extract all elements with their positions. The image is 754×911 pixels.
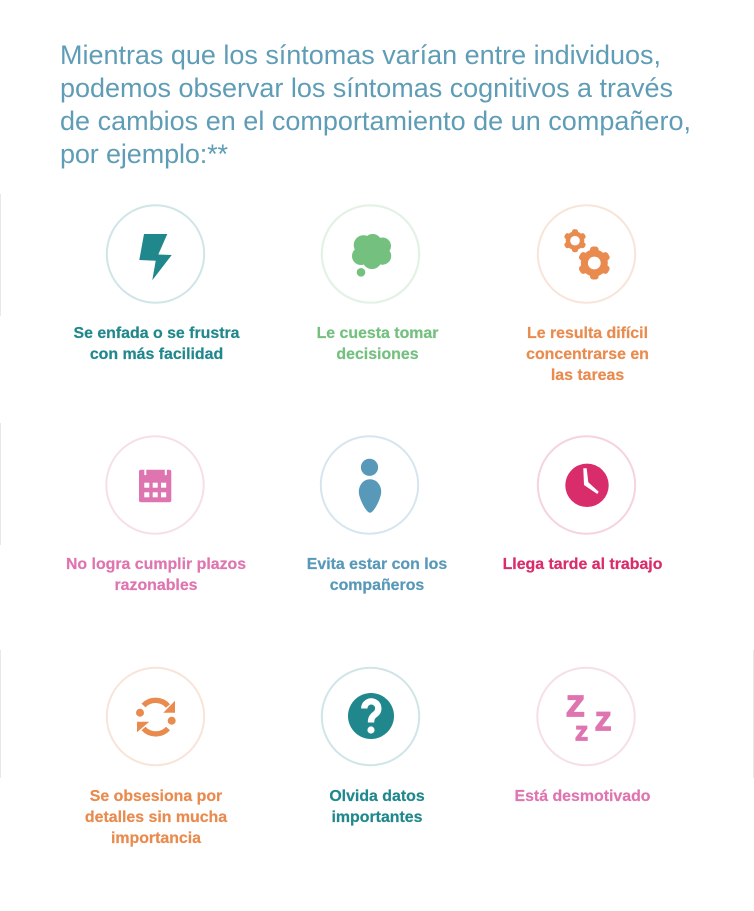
icon: lightning bolt (107, 205, 204, 303)
panel: concentration (526, 205, 649, 384)
title: de cambios en el comportamiento de un compañero, (60, 106, 691, 136)
label: frustration: Se enfada o se frustra (73, 325, 240, 342)
label: frustration: con más facilidad (90, 346, 223, 363)
label: concentration: concentrarse en (526, 346, 649, 363)
icon: person (321, 436, 418, 534)
label: avoids colleagues: compañeros (330, 577, 424, 594)
title (60, 40, 691, 169)
icon: question mark (322, 668, 419, 765)
panel: unmotivated (514, 668, 651, 805)
label: concentration: Le resulta difícil (527, 325, 648, 342)
title: por ejemplo:** (60, 139, 228, 169)
label: deadlines: No logra cumplir plazos (66, 556, 246, 573)
panel: deadlines (66, 436, 246, 594)
panel: frustration (73, 205, 240, 363)
title: podemos observar los síntomas cognitivos a través (60, 73, 673, 103)
icon: sleeping Z letters: Z (596, 708, 611, 736)
panel: obsession (85, 668, 227, 847)
icon: thought cloud (322, 205, 419, 303)
label: deadlines: razonables (114, 577, 198, 594)
panel: avoids colleagues (307, 436, 447, 594)
icon: sleeping Z letters (537, 668, 635, 765)
label: late: Llega tarde al trabajo (503, 556, 663, 573)
panel: late (503, 436, 663, 573)
icon: sync arrows (107, 668, 204, 765)
label: obsession: importancia (111, 830, 201, 847)
icon: clock (538, 436, 635, 534)
label: forgets: importantes (332, 809, 423, 826)
icon: sleeping Z letters: Z (576, 724, 588, 745)
label: unmotivated: Está desmotivado (514, 788, 651, 805)
icon: calendar (106, 436, 204, 534)
panel: decisions (317, 205, 438, 363)
label: concentration: las tareas (551, 367, 624, 384)
panel: forgets (322, 668, 425, 826)
icon: sleeping Z letters: Z (566, 691, 584, 723)
label: decisions: decisiones (336, 346, 419, 363)
icon: gears (538, 205, 635, 303)
label: forgets: Olvida datos (329, 788, 425, 805)
label: decisions: Le cuesta tomar (317, 325, 438, 342)
label: obsession: detalles sin mucha (85, 809, 227, 826)
label: avoids colleagues: Evita estar con los (307, 556, 447, 573)
label: obsession: Se obsesiona por (90, 788, 222, 805)
title: Mientras que los síntomas varían entre individuos, (60, 40, 661, 70)
